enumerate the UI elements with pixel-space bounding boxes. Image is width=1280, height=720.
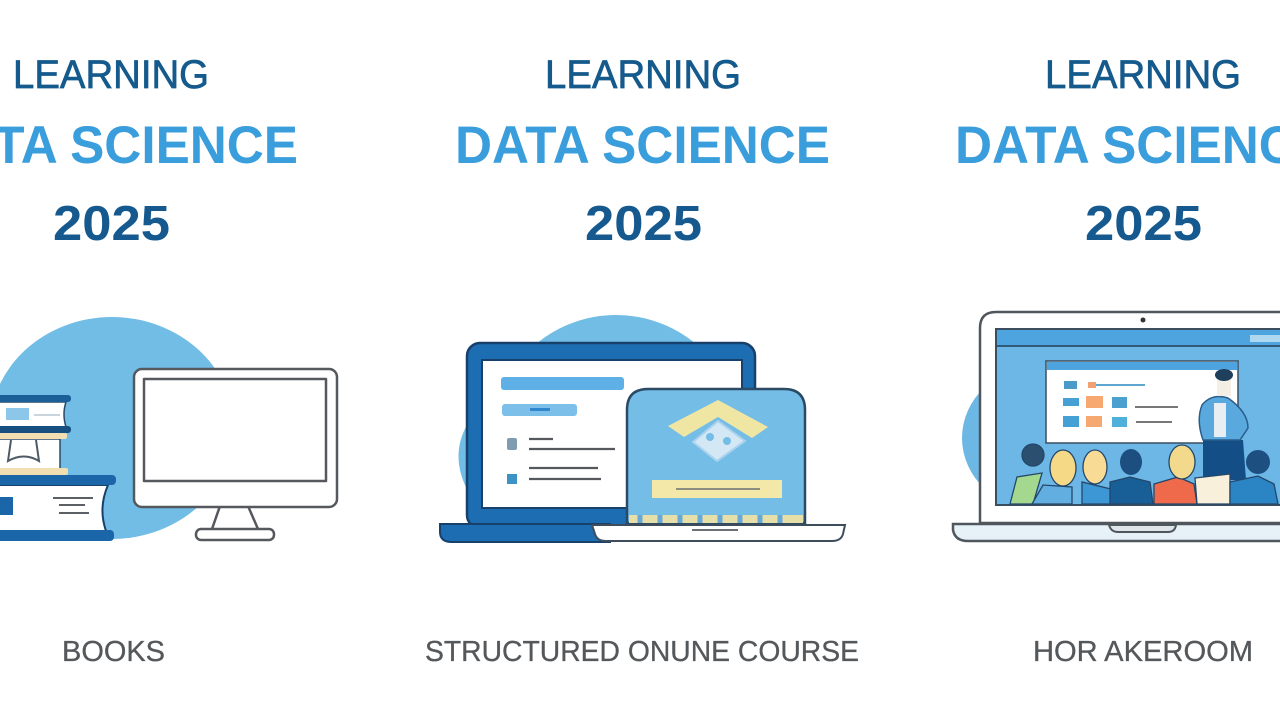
heading: learning data science 2025 (left): LEARNING (13, 53, 209, 97)
icon: laptop with classroom scene (953, 312, 1280, 541)
icon: stack of books (0, 395, 116, 541)
caption: classroom: HOR AKEROOM (1033, 636, 1253, 668)
icon: desktop monitor (134, 369, 337, 540)
icon: blue circle backdrop (0, 317, 234, 539)
heading: learning data science 2025 (left) (0, 53, 298, 251)
presenter figure (1199, 369, 1248, 480)
icon: laptop with course page (440, 343, 755, 542)
panel: online course column (425, 53, 859, 668)
heading: learning data science 2025 (middle): DATA SCIENCE (455, 116, 830, 175)
heading: learning data science 2025 (right): 2025 (1085, 197, 1202, 251)
caption: books: BOOKS (62, 636, 165, 668)
caption: structured online course: STRUCTURED ONUNE COURSE (425, 636, 859, 668)
icon: tablet with course emblem (627, 389, 805, 523)
icon: blue circle backdrop (458, 315, 696, 495)
heading: learning data science 2025 (middle): LEARNING (545, 53, 741, 97)
heading: learning data science 2025 (right) (955, 53, 1280, 251)
heading: learning data science 2025 (left): 2025 (53, 197, 170, 251)
heading: learning data science 2025 (right): LEARNING (1045, 53, 1241, 97)
audience figures (1010, 444, 1278, 504)
laptop base (953, 524, 1280, 541)
icon: laptop base (592, 525, 845, 541)
heading: learning data science 2025 (middle) (455, 53, 830, 251)
heading: learning data science 2025 (middle): 2025 (585, 197, 702, 251)
panel: books column (0, 53, 337, 668)
slide on the classroom screen (1046, 361, 1238, 443)
panel: classroom column (953, 53, 1280, 668)
icon: blue circle backdrop (962, 366, 1118, 510)
